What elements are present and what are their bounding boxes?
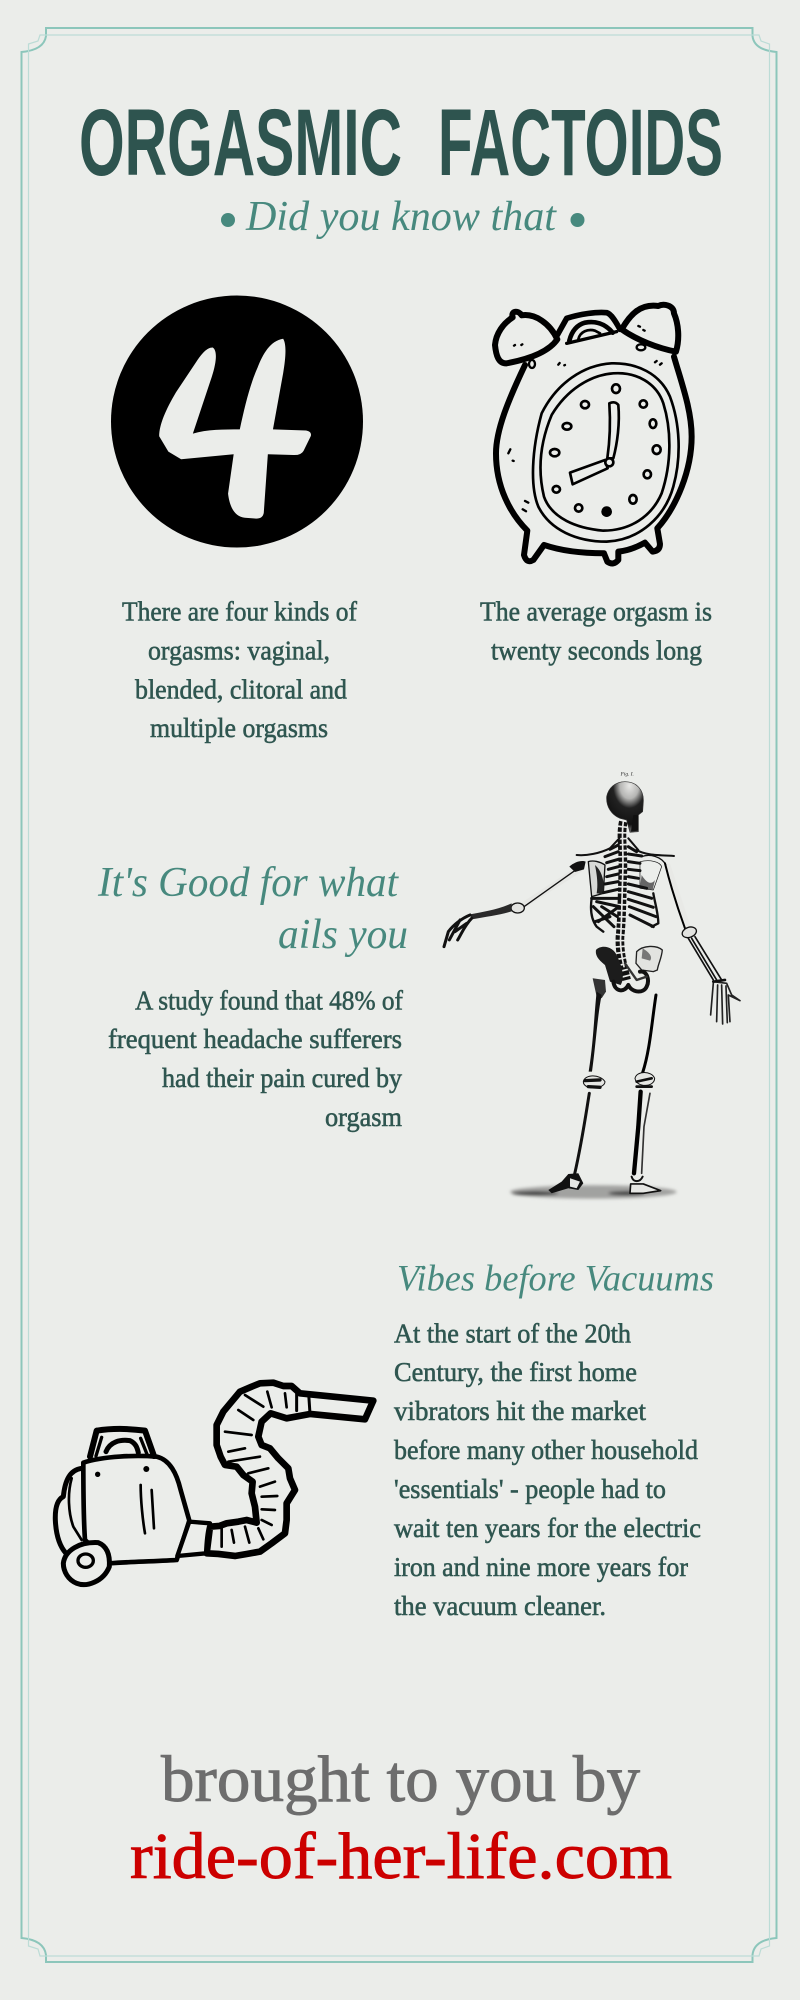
- caption: twenty seconds: twenty seconds long: [491, 636, 702, 666]
- clock body: [496, 357, 692, 563]
- caption: twenty seconds: [480, 597, 712, 666]
- footer: brought to you by: brought to you by: [161, 1743, 640, 1816]
- vacuum hose: [207, 1383, 373, 1556]
- wheel: [63, 1543, 109, 1585]
- icon: number four in black circle: [111, 296, 363, 548]
- right bell: [622, 305, 678, 352]
- text block: vibrators history: iron and nine more years for: [394, 1552, 688, 1582]
- caption: twenty seconds: The average orgasm is: [480, 597, 712, 627]
- left leg: [548, 978, 606, 1193]
- caption: four kinds: multiple orgasms: [150, 713, 328, 743]
- footer: website link: ride-of-her-life.com: [130, 1820, 672, 1893]
- text block: headache study: had their pain cured by: [162, 1063, 402, 1093]
- text block: headache study: orgasm: [325, 1102, 402, 1132]
- small ticks on clock: [508, 326, 662, 511]
- spine: [620, 822, 627, 980]
- hour markers: [550, 384, 661, 512]
- caption: four kinds: orgasms: vaginal,: [148, 636, 330, 666]
- figure label: Fig. I.: [620, 772, 634, 778]
- text block: vibrators history: before many other household: [394, 1435, 698, 1465]
- rear bumper: [55, 1468, 82, 1553]
- ground shadow: [510, 1185, 677, 1199]
- icon: alarm clock: [495, 305, 692, 563]
- pelvis: [596, 946, 662, 991]
- text block: vibrators history: vibrators hit the market: [394, 1396, 646, 1426]
- text block: headache study: frequent headache sufferers: [108, 1024, 402, 1054]
- caption: four kinds: There are four kinds of: [122, 597, 357, 627]
- left bell: [495, 312, 557, 363]
- clock hands: [570, 402, 619, 484]
- text block: vibrators history: At the start of the 20th: [394, 1318, 631, 1348]
- heading: good for what ails you: [97, 860, 408, 958]
- right arm: [665, 863, 740, 1024]
- dots and lines on body: [95, 1466, 154, 1533]
- right leg: [630, 995, 661, 1193]
- left arm: [444, 861, 586, 947]
- heading: good for what ails you: ails you: [278, 912, 408, 958]
- illustration: vacuum cleaner: [55, 1383, 373, 1585]
- vacuum body: [83, 1456, 189, 1563]
- text block: vibrators history: the vacuum cleaner.: [394, 1591, 606, 1621]
- shoulder girdle: [577, 838, 674, 865]
- hose ribs: [222, 1392, 310, 1547]
- text block: vibrators history: wait ten years for the electric: [394, 1513, 701, 1543]
- hose connector: [177, 1522, 210, 1556]
- text block: headache study: A study found that 48% of: [135, 985, 403, 1015]
- text block: headache study: [108, 985, 403, 1132]
- text block: vibrators history: 'essentials' - people had to: [394, 1474, 666, 1504]
- heading: good for what ails you: It's Good for what: [97, 860, 399, 906]
- skull: [607, 782, 643, 832]
- text block: vibrators history: Century, the first home: [394, 1357, 637, 1387]
- clock face rings: [533, 363, 679, 542]
- text block: vibrators history: [394, 1318, 701, 1621]
- title: ORGASMIC: [79, 90, 402, 196]
- carry handle: [90, 1429, 154, 1457]
- caption: four kinds: blended, clitoral and: [135, 674, 347, 704]
- caption: four kinds: [122, 597, 357, 743]
- ribcage: [588, 845, 662, 932]
- carry handle: [557, 312, 620, 335]
- subtitle: Did you know that: [245, 194, 557, 240]
- illustration: skeleton: [444, 772, 740, 1199]
- heading: vibes before vacuums: Vibes before Vacuums: [397, 1259, 714, 1300]
